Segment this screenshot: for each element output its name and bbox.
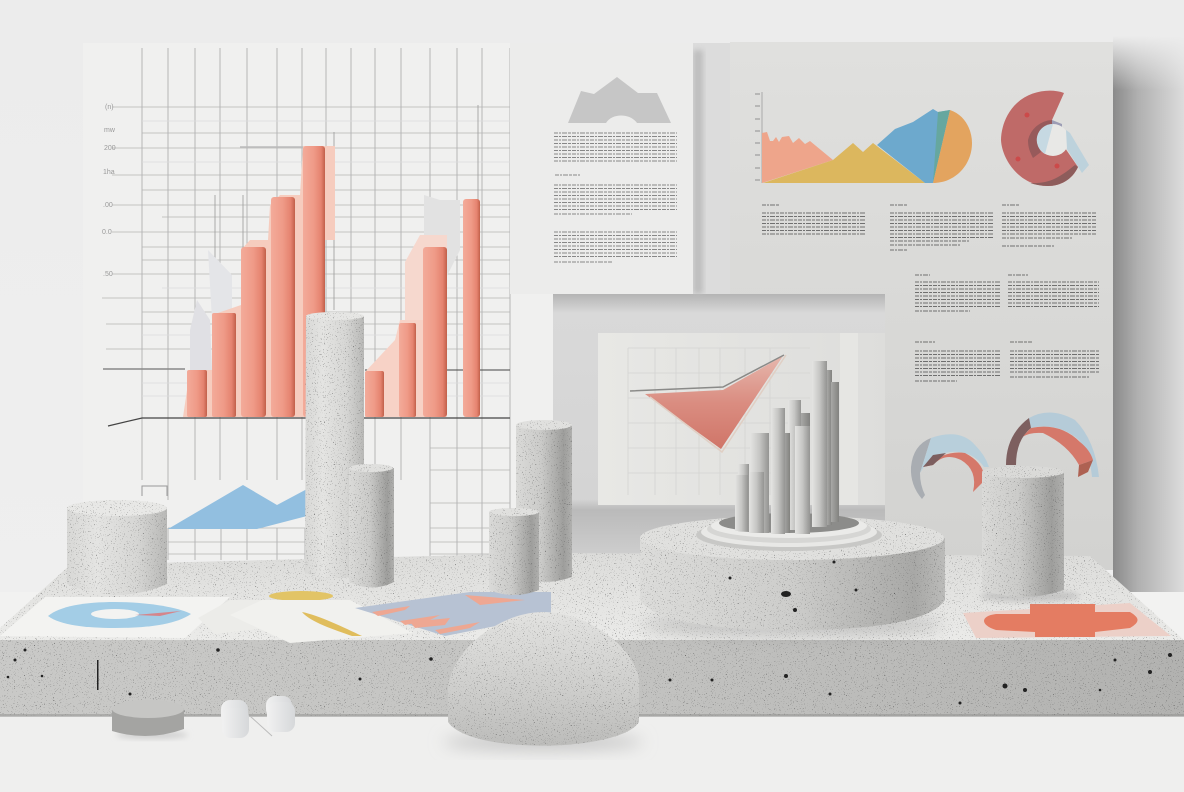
disk pits (728, 560, 858, 612)
3D gray bars (735, 361, 839, 534)
ghost shapes behind bars (183, 146, 460, 417)
axis labels: 1ha (103, 169, 115, 176)
cylinder: right block (980, 466, 1080, 602)
axis labels: 0.0 (102, 229, 112, 236)
concrete platform (0, 553, 1184, 717)
axis labels: .00 (103, 202, 113, 209)
paper: yellow strokes (198, 591, 413, 643)
cylinder: left block (67, 500, 167, 595)
cylinder: short (489, 508, 539, 595)
bars (187, 146, 480, 417)
cylinder: tall pillar (305, 312, 364, 578)
area chart (755, 92, 972, 183)
axis labels: .50 (103, 271, 113, 278)
panel: colour charts sheet (730, 42, 1113, 570)
panel: bar chart sheet (83, 43, 553, 560)
axis labels: (n) (105, 104, 114, 111)
donut chart (1001, 91, 1089, 186)
gauge arc left (911, 434, 989, 499)
triangle area (630, 355, 786, 452)
text lines (554, 133, 677, 262)
gauge arc right (1006, 412, 1099, 477)
floor (0, 592, 1184, 792)
grid lines (102, 48, 510, 560)
cylinder: right tall back (516, 420, 572, 582)
gray arch shape (568, 77, 671, 123)
blue mountain chart (168, 485, 307, 529)
axis labels: 200 (104, 145, 116, 152)
dome block (443, 612, 643, 750)
paper: blue ring (0, 597, 230, 638)
cylinder: small dark (349, 464, 394, 588)
concrete disk with ring (640, 361, 945, 637)
paper: orange cross (963, 603, 1171, 638)
small puck (112, 700, 188, 739)
white capsules (221, 696, 295, 738)
panel: triangle chart sheet (598, 333, 885, 505)
panel: text sheet (510, 43, 693, 294)
paper: coloured stripes (355, 592, 551, 636)
axis labels (102, 104, 116, 278)
text blocks (762, 205, 1099, 381)
axis labels: mw (104, 127, 116, 134)
stepped ring (696, 513, 882, 551)
